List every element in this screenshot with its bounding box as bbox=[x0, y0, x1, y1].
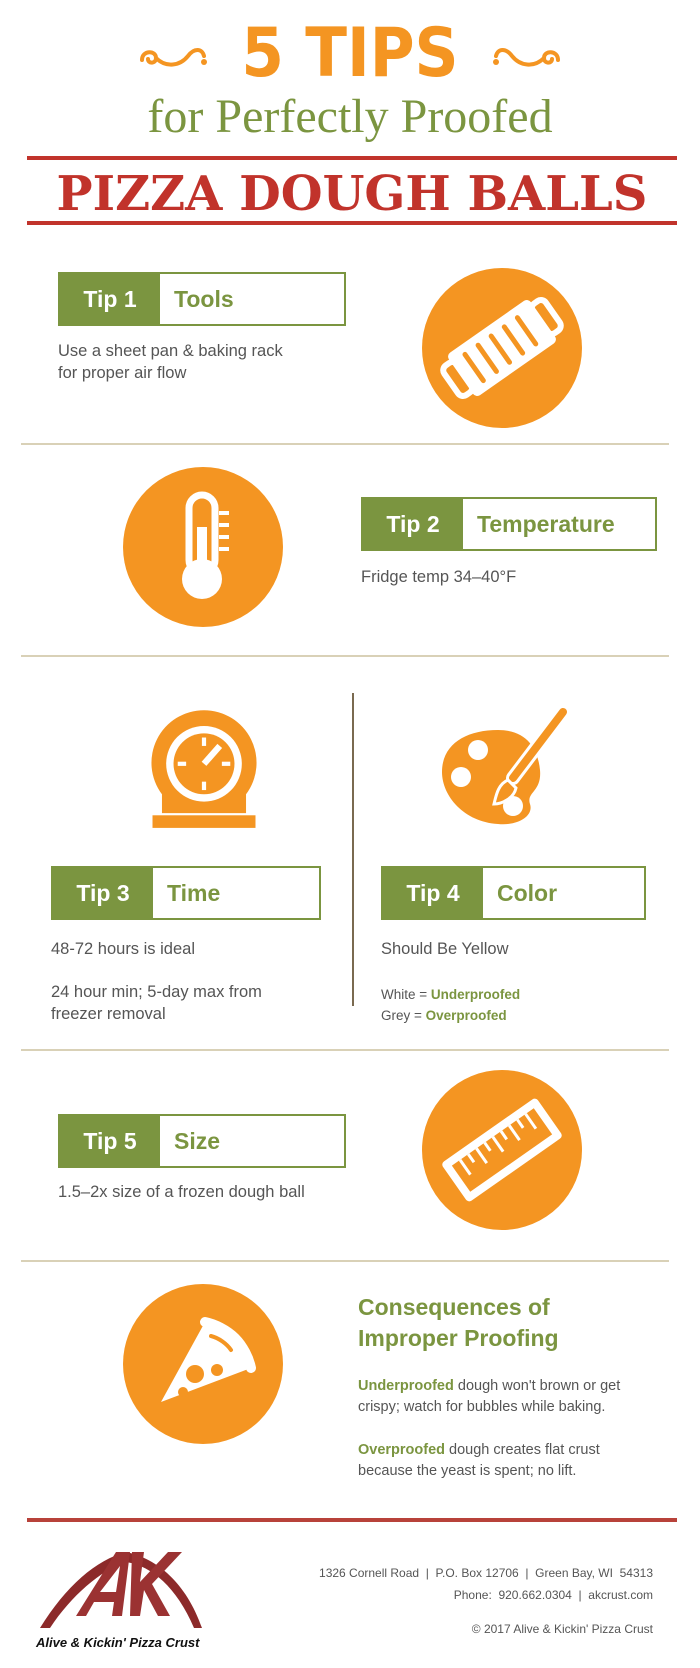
icon: right swirl bbox=[493, 48, 560, 67]
logo bbox=[36, 1552, 202, 1650]
tip 2 box bbox=[361, 497, 657, 551]
consequences text bbox=[358, 1378, 620, 1415]
consequences heading bbox=[358, 1294, 559, 1351]
icon: pizza slice bbox=[123, 1284, 283, 1444]
title: 5 TIPS: 5 TIPS bbox=[241, 14, 459, 93]
contact info: 1326 Cornell Road | P.O. Box 12706 | Green Bay, WI 54313 bbox=[319, 1566, 653, 1580]
contact info: Phone: 920.662.0304 | akcrust.com bbox=[454, 1588, 653, 1602]
icon: palette bbox=[442, 708, 567, 824]
tip 5 box: Size bbox=[174, 1128, 220, 1154]
subtitle: for Perfectly Proofed bbox=[147, 90, 553, 143]
title: 5 TIPS bbox=[140, 14, 560, 93]
icon: timer clock bbox=[151, 710, 257, 828]
tip 4 text: Should Be Yellow bbox=[381, 940, 509, 958]
tip 2 box: Temperature bbox=[477, 510, 615, 536]
text: Grey = Overproofed bbox=[381, 1008, 507, 1023]
icon: baking rack bbox=[422, 268, 582, 428]
icon: thermometer bbox=[123, 467, 283, 627]
text: Overproofed dough creates flat crust bbox=[358, 1442, 600, 1458]
text: White = Underproofed bbox=[381, 987, 520, 1002]
contact info bbox=[319, 1566, 653, 1636]
tip 3 text: 48-72 hours is ideal bbox=[51, 940, 195, 958]
tip 1 text bbox=[58, 342, 283, 382]
tip 3 box bbox=[51, 866, 321, 920]
consequences text: crispy; watch for bubbles while baking. bbox=[358, 1399, 605, 1415]
icon: ruler bbox=[422, 1070, 582, 1230]
tip 2 text: Fridge temp 34–40°F bbox=[361, 568, 516, 586]
tip 2 box: Tip 2 bbox=[386, 510, 440, 536]
heading: pizza dough balls: PIZZA DOUGH BALLS bbox=[57, 166, 647, 222]
tip 3 box: Time bbox=[167, 880, 220, 906]
tip 5 box: Tip 5 bbox=[83, 1128, 137, 1154]
tip 1 text: Use a sheet pan & baking rack bbox=[58, 342, 283, 360]
tip 4 box: Color bbox=[497, 880, 557, 906]
tip 4 box bbox=[381, 866, 646, 920]
tip 1 box: Tip 1 bbox=[83, 286, 137, 312]
tip 5 box bbox=[58, 1114, 346, 1168]
tip 1 text: for proper air flow bbox=[58, 364, 186, 382]
tip 1 box bbox=[58, 272, 346, 326]
logo: Alive & Kickin' Pizza Crust bbox=[36, 1635, 199, 1650]
text: because the yeast is spent; no lift. bbox=[358, 1463, 576, 1479]
tip 1 box: Tools bbox=[174, 286, 234, 312]
tip 3 box: Tip 3 bbox=[76, 880, 130, 906]
text: 24 hour min; 5-day max from bbox=[51, 983, 262, 1001]
consequences text: Underproofed dough won't brown or get bbox=[358, 1378, 620, 1394]
contact info: © 2017 Alive & Kickin' Pizza Crust bbox=[472, 1622, 653, 1636]
tip 4 box: Tip 4 bbox=[406, 880, 460, 906]
text: freezer removal bbox=[51, 1005, 166, 1023]
tip 5 text: 1.5–2x size of a frozen dough ball bbox=[58, 1183, 305, 1201]
consequences heading: Improper Proofing bbox=[358, 1325, 559, 1351]
consequences heading: Consequences of bbox=[358, 1294, 550, 1320]
icon: left swirl bbox=[140, 48, 207, 67]
